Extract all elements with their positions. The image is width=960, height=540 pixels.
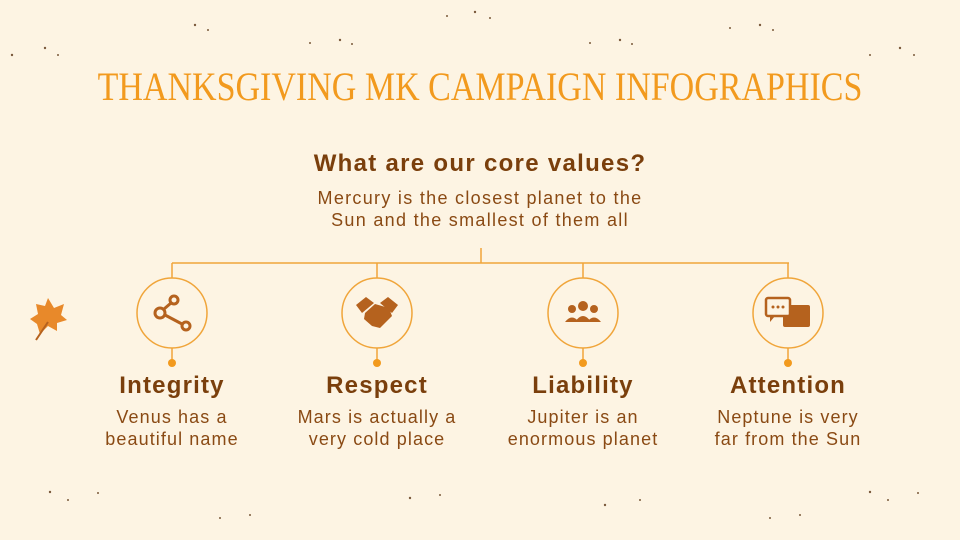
value: Liability: Liability xyxy=(532,372,634,399)
value: Attention: Neptune is very xyxy=(717,407,859,427)
value: Integrity: Venus has a xyxy=(116,407,228,427)
value: Respect: Respect xyxy=(326,372,428,399)
value: Attention: Attention xyxy=(730,372,846,399)
title: THANKSGIVING MK CAMPAIGN INFOGRAPHICS xyxy=(98,64,862,109)
value: Integrity: Integrity xyxy=(119,372,225,399)
icon: chat xyxy=(766,298,810,327)
icon: share xyxy=(155,296,190,330)
value: Respect: Mars is actually a xyxy=(298,407,456,427)
value: Respect xyxy=(298,372,456,449)
value: Liability xyxy=(508,372,658,449)
icon: team xyxy=(565,301,601,322)
question description xyxy=(318,188,642,230)
value: Attention: far from the Sun xyxy=(715,429,861,449)
icon: handshake xyxy=(356,297,398,328)
question description: Sun and the smallest of them all xyxy=(331,210,629,230)
value: Attention xyxy=(714,372,861,449)
value: Liability: enormous planet xyxy=(508,429,658,449)
value: Liability: Jupiter is an xyxy=(527,407,639,427)
question heading: What are our core values? xyxy=(314,150,646,177)
icon: leaf xyxy=(30,298,67,340)
value: Integrity xyxy=(105,372,239,449)
value: Respect: very cold place xyxy=(309,429,445,449)
question description: Mercury is the closest planet to the xyxy=(318,188,642,208)
value: Integrity: beautiful name xyxy=(105,429,239,449)
